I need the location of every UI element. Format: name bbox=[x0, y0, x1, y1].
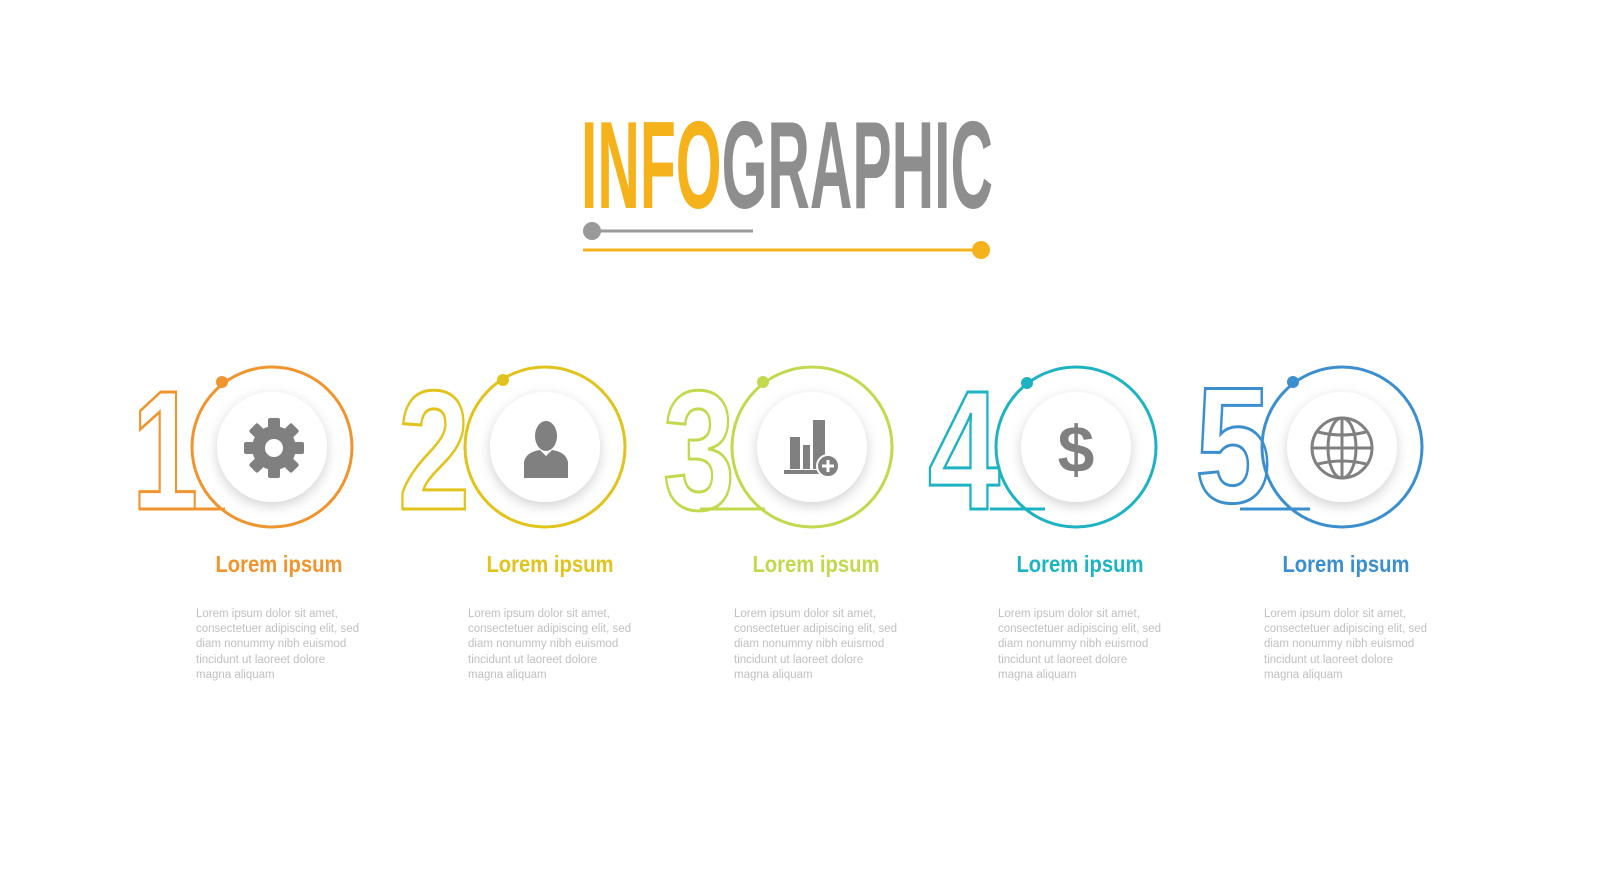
icon: globe bbox=[1312, 418, 1372, 478]
step 3: 3 bbox=[663, 356, 735, 546]
body 3: magna aliquam bbox=[734, 669, 813, 681]
icon: person bbox=[524, 421, 568, 478]
heading 1: Lorem ipsum bbox=[215, 551, 343, 577]
body 3: Lorem ipsum dolor sit amet, bbox=[734, 608, 876, 620]
body 3: tincidunt ut laoreet dolore bbox=[734, 654, 863, 666]
icon: gear bbox=[244, 418, 304, 478]
body 2: tincidunt ut laoreet dolore bbox=[468, 654, 597, 666]
step 2 bbox=[398, 356, 625, 546]
body 2: magna aliquam bbox=[468, 669, 547, 681]
body 4 bbox=[998, 608, 1161, 681]
title bbox=[581, 97, 993, 259]
heading 4: Lorem ipsum bbox=[1016, 551, 1144, 577]
body 5: diam nonummy nibh euismod bbox=[1264, 638, 1414, 650]
step 4: 4 bbox=[928, 356, 1000, 546]
body 2: consectetuer adipiscing elit, sed bbox=[468, 623, 631, 635]
heading 2: Lorem ipsum bbox=[486, 551, 614, 577]
body 5: Lorem ipsum dolor sit amet, bbox=[1264, 608, 1406, 620]
body 4: diam nonummy nibh euismod bbox=[998, 638, 1148, 650]
body 5: magna aliquam bbox=[1264, 669, 1343, 681]
body 2: diam nonummy nibh euismod bbox=[468, 638, 618, 650]
icon: dollar: $ bbox=[1058, 412, 1094, 486]
body 1: magna aliquam bbox=[196, 669, 275, 681]
body 5 bbox=[1264, 608, 1427, 681]
body 3: consectetuer adipiscing elit, sed bbox=[734, 623, 897, 635]
body 1: tincidunt ut laoreet dolore bbox=[196, 654, 325, 666]
body 1: consectetuer adipiscing elit, sed bbox=[196, 623, 359, 635]
body 1: diam nonummy nibh euismod bbox=[196, 638, 346, 650]
heading 3: Lorem ipsum bbox=[752, 551, 880, 577]
body 3 bbox=[734, 608, 897, 681]
body 3: diam nonummy nibh euismod bbox=[734, 638, 884, 650]
title: INFOGRAPHIC bbox=[581, 97, 993, 235]
body 1 bbox=[196, 608, 359, 681]
body 4: tincidunt ut laoreet dolore bbox=[998, 654, 1127, 666]
icon: chart plus bbox=[784, 420, 839, 477]
body 4: consectetuer adipiscing elit, sed bbox=[998, 623, 1161, 635]
step 5: 5 bbox=[1195, 353, 1271, 537]
step 3 bbox=[663, 356, 892, 546]
heading 5: Lorem ipsum bbox=[1282, 551, 1410, 577]
body 4: Lorem ipsum dolor sit amet, bbox=[998, 608, 1140, 620]
step 4 bbox=[928, 356, 1156, 546]
body 1: Lorem ipsum dolor sit amet, bbox=[196, 608, 338, 620]
body 2 bbox=[468, 608, 631, 681]
body 5: tincidunt ut laoreet dolore bbox=[1264, 654, 1393, 666]
step 1: 1 bbox=[132, 356, 198, 546]
body 4: magna aliquam bbox=[998, 669, 1077, 681]
step 5 bbox=[1195, 353, 1422, 537]
step 2: 2 bbox=[398, 356, 470, 546]
step 1 bbox=[132, 356, 352, 546]
body 5: consectetuer adipiscing elit, sed bbox=[1264, 623, 1427, 635]
body 2: Lorem ipsum dolor sit amet, bbox=[468, 608, 610, 620]
